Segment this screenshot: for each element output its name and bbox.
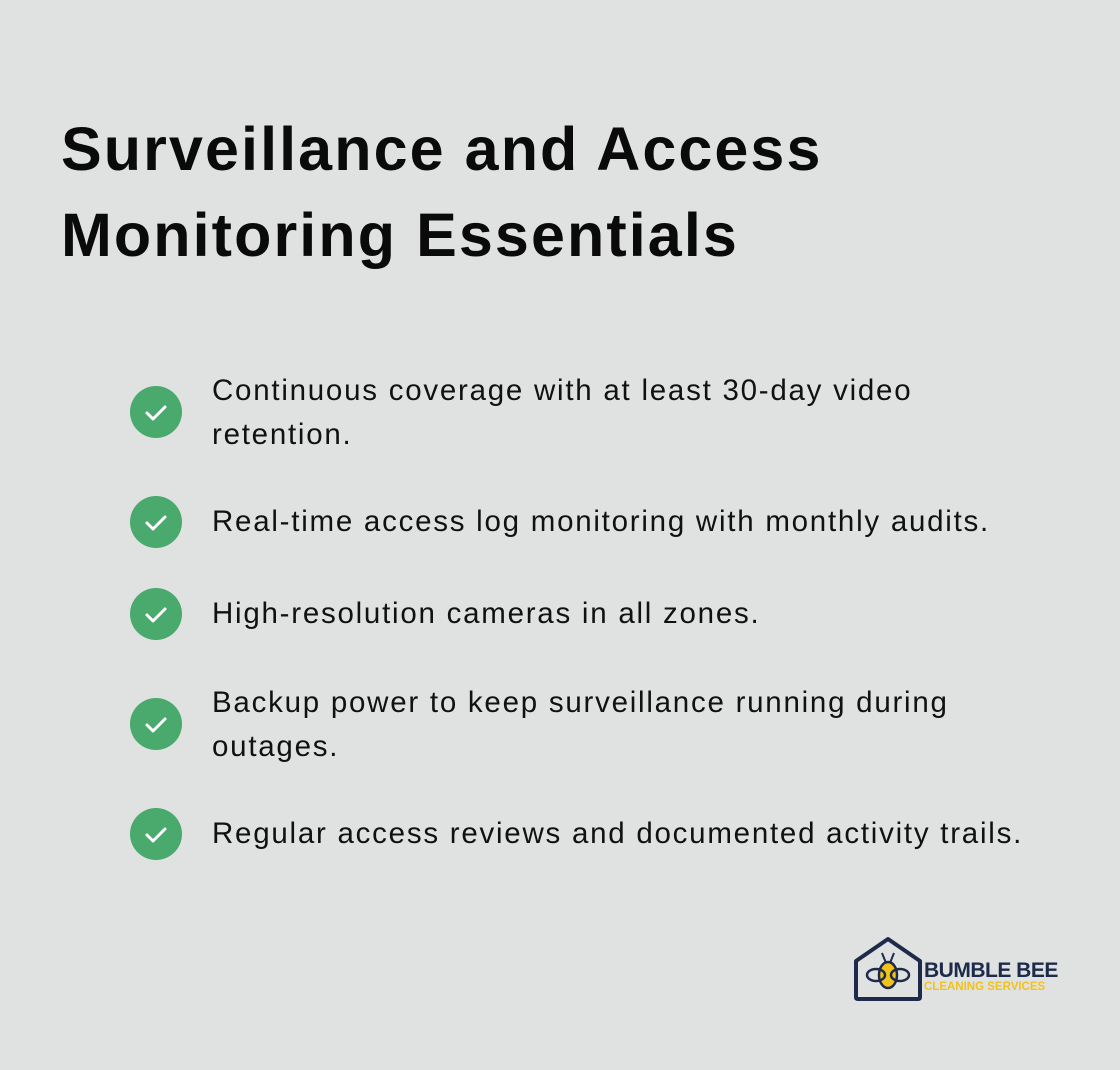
logo	[854, 937, 1058, 1001]
text: outages.	[212, 730, 339, 763]
icon: check	[130, 496, 182, 548]
item 3	[130, 588, 760, 640]
title: Monitoring Essentials	[61, 201, 739, 269]
item 4	[130, 686, 949, 763]
title	[61, 115, 822, 269]
item 2	[130, 496, 990, 548]
icon: check	[130, 588, 182, 640]
logo text: CLEANING SERVICES	[924, 981, 1045, 993]
item 1	[130, 374, 912, 451]
item 5	[130, 808, 1023, 860]
icon: check	[130, 808, 182, 860]
logo text: BUMBLE BEE	[924, 959, 1058, 982]
text: Backup power to keep surveillance running during	[212, 686, 949, 719]
text: Real-time access log monitoring with monthly audits.	[212, 505, 990, 538]
title: Surveillance and Access	[61, 115, 822, 183]
text: Continuous coverage with at least 30-day video	[212, 374, 912, 407]
icon: check	[130, 386, 182, 438]
logo text	[924, 959, 1058, 993]
text: High-resolution cameras in all zones.	[212, 597, 760, 630]
icon: bee house	[854, 937, 922, 1001]
text	[212, 686, 949, 763]
text	[212, 374, 912, 451]
text: retention.	[212, 418, 352, 451]
text: Regular access reviews and documented activity trails.	[212, 817, 1023, 850]
icon: check	[130, 698, 182, 750]
